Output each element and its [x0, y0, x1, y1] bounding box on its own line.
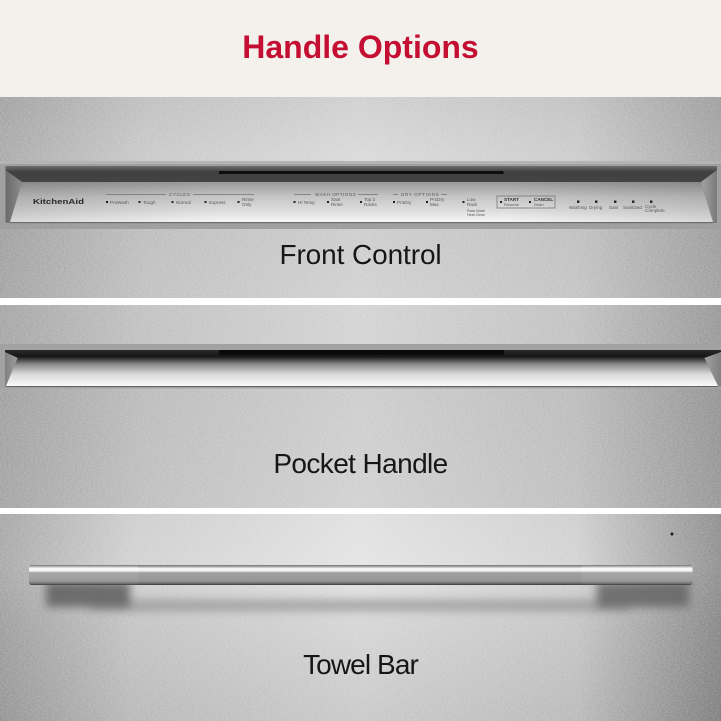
control panel labels: Drain — [534, 202, 544, 207]
control panel labels: Rinse — [242, 197, 254, 202]
control panel labels: DRY OPTIONS — [401, 192, 439, 197]
control panel labels: KitchenAid — [33, 199, 84, 206]
control panel labels: ProDry — [397, 200, 412, 205]
panel: front control — [0, 97, 721, 298]
control panel labels: Racks — [364, 202, 377, 207]
control panel labels: Complete — [645, 208, 665, 213]
control panel labels: Low — [467, 197, 476, 202]
label: Pocket Handle: Pocket Handle — [273, 448, 448, 479]
control panel labels: WASH OPTIONS — [315, 192, 356, 197]
towel bar handle — [29, 565, 692, 585]
control panel labels: Tough — [143, 200, 156, 205]
control panel labels: Normal — [176, 200, 191, 205]
control panel labels — [33, 192, 665, 217]
bar shadow — [46, 582, 689, 610]
title banner — [0, 0, 721, 97]
control panel labels: CANCEL — [534, 197, 553, 202]
control panel labels: Rinse — [331, 202, 343, 207]
control panel labels: Sani — [331, 197, 340, 202]
control panel labels: Rack Wash — [467, 209, 485, 213]
control panel labels: Rack — [467, 202, 478, 207]
control panel labels: Sani — [609, 205, 618, 210]
control panel labels: Sanitized — [623, 205, 642, 210]
control panel labels: Top 2 — [364, 197, 376, 202]
control panel labels: ProDry — [430, 197, 445, 202]
indicator dot — [670, 532, 674, 536]
control panel labels: START — [504, 197, 519, 202]
panel: towel bar — [0, 514, 721, 721]
control panel labels: Heat Clean — [467, 213, 485, 217]
control panel labels: Hi Temp — [298, 200, 315, 205]
brushed steel texture — [0, 305, 721, 508]
control panel labels: Express — [209, 200, 226, 205]
pocket recess — [0, 344, 721, 388]
control panel labels: Cycle — [645, 204, 657, 209]
label: Towel Bar: Towel Bar — [303, 649, 418, 680]
control panel labels: CYCLES — [169, 192, 190, 197]
control panel labels: Drying — [589, 205, 603, 210]
panel: pocket handle — [0, 305, 721, 508]
control panel labels: Washing — [569, 205, 587, 210]
control panel labels: ProWash — [110, 200, 129, 205]
control panel labels: Max — [430, 202, 439, 207]
control panel labels: Resume — [504, 202, 520, 207]
label: Front Control: Front Control — [279, 239, 442, 270]
brushed steel texture — [0, 97, 721, 298]
control recess — [0, 161, 721, 229]
brushed steel texture — [0, 514, 721, 721]
control panel labels: Only — [242, 202, 252, 207]
heading: Handle Options: Handle Options — [242, 29, 479, 65]
